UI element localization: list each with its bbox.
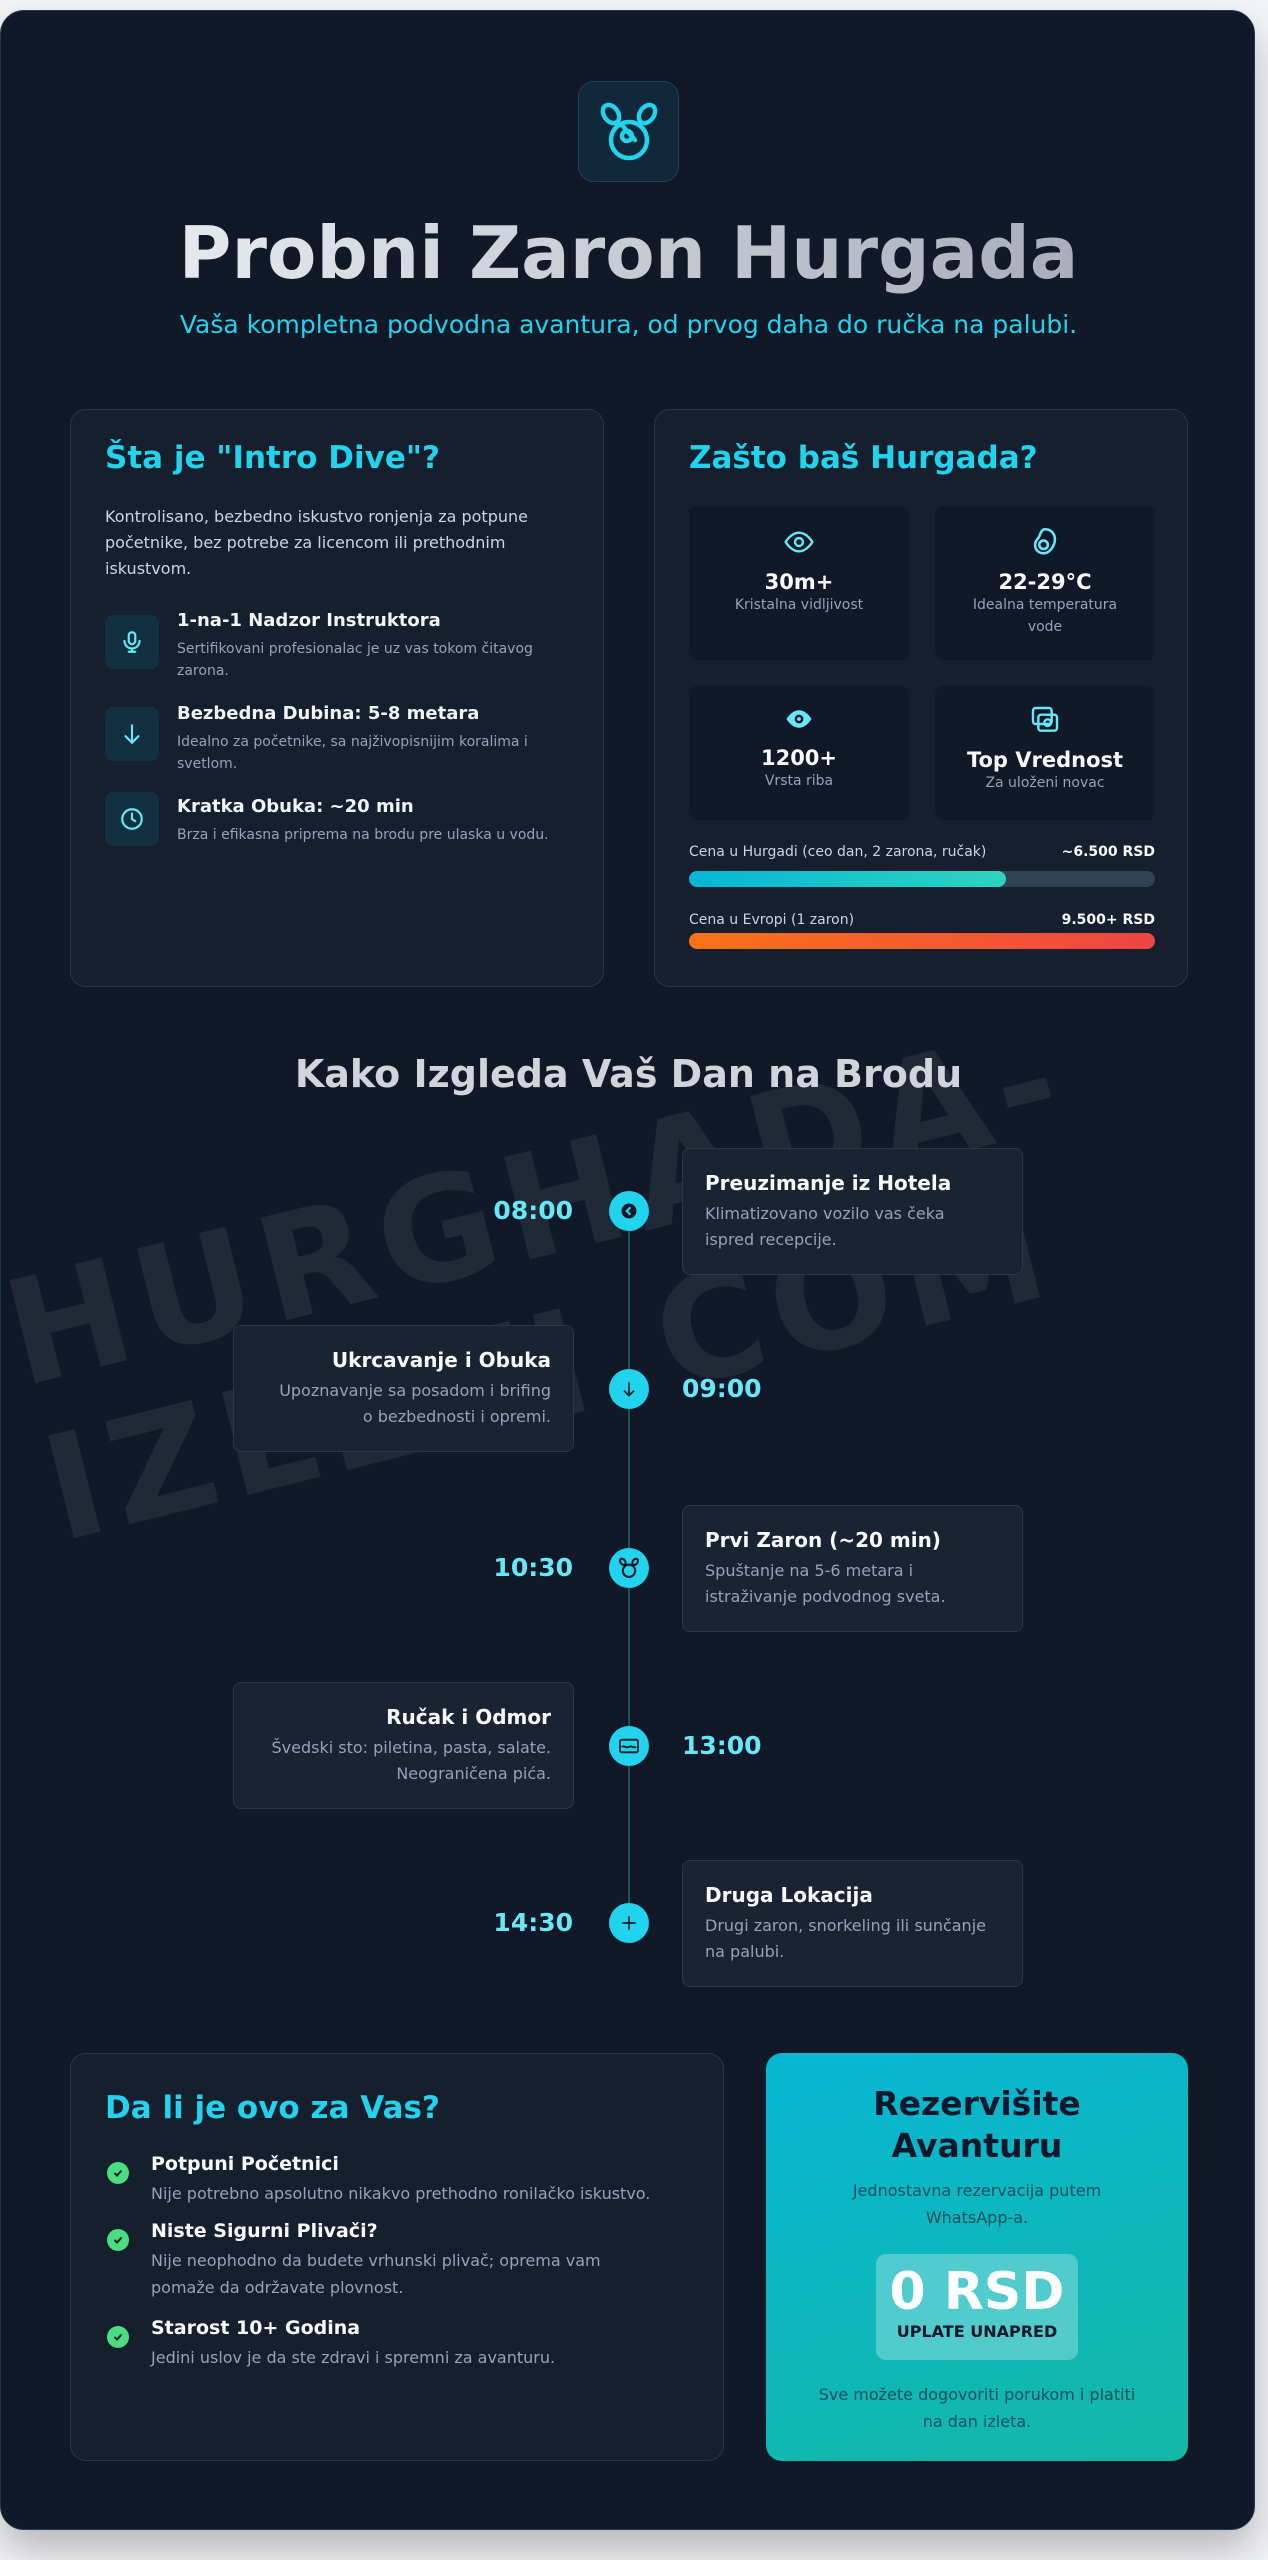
panel: is this for you: Nije potrebno apsolutno nikakvo prethodno ronilačko iskustvo. — [151, 2184, 650, 2203]
bar chart: price comparison: 9.500+ RSD — [1062, 912, 1155, 928]
item 3 — [107, 2326, 129, 2348]
step 13:00: Švedski sto: piletina, pasta, salate. Neograničena pića. — [272, 1738, 551, 1783]
panel: why hurghada: Zašto baš Hurgada? — [689, 440, 1038, 476]
icon: mic — [105, 615, 159, 669]
feature 2: Bezbedna Dubina: 5-8 metara — [177, 703, 479, 724]
bar chart: price comparison: Cena u Evropi (1 zaron) — [689, 912, 854, 928]
panel: is this for you — [70, 2053, 724, 2461]
stat: visibility — [689, 506, 909, 660]
price box: UPLATE UNAPRED — [897, 2322, 1057, 2341]
icon: diver logo — [578, 81, 679, 182]
timeline: 13:00 — [682, 1731, 762, 1760]
step 08:00: 08:00 — [493, 1196, 573, 1225]
panel: is this for you: Jedini uslov je da ste zdravi i spremni za avanturu. — [151, 2348, 555, 2367]
step 13:00 — [233, 1682, 574, 1809]
step 10:30: 10:30 — [493, 1553, 573, 1582]
stat: fish — [689, 686, 909, 820]
stat: temperature: 22-29°C — [998, 570, 1092, 594]
panel: intro dive: Sertifikovani profesionalac je uz vas tokom čitavog zarona. — [177, 641, 533, 679]
bar chart: price comparison: Cena u Hurgadi (ceo dan, 2 zarona, ručak) — [689, 844, 986, 860]
panel: why hurghada — [654, 409, 1188, 987]
step 09:00: Ukrcavanje i Obuka — [332, 1348, 551, 1372]
stat: fish: Vrsta riba — [765, 773, 833, 789]
timeline — [233, 1148, 1023, 1987]
feature 3: Kratka Obuka: ~20 min — [177, 796, 414, 817]
step 09:00: Upoznavanje sa posadom i brifing o bezbednosti i opremi. — [279, 1381, 551, 1426]
panel: is this for you: Potpuni Početnici — [151, 2153, 339, 2175]
timeline: Drugi zaron, snorkeling ili sunčanje na palubi. — [705, 1916, 986, 1961]
stat: value: Top Vrednost — [967, 748, 1123, 772]
stat: fish: 1200+ — [761, 746, 837, 770]
timeline: Preuzimanje iz Hotela — [705, 1171, 951, 1195]
panel: CTA booking: Jednostavna rezervacija putem WhatsApp-a. — [853, 2181, 1101, 2227]
timeline: Druga Lokacija — [705, 1883, 873, 1907]
stat: visibility: Kristalna vidljivost — [735, 597, 863, 613]
timeline: 09:00 — [682, 1374, 762, 1403]
panel: CTA booking: Rezervišite — [873, 2084, 1081, 2123]
panel: CTA booking: Sve možete dogovoriti porukom i platiti na dan izleta. — [819, 2385, 1135, 2431]
item 2 — [107, 2229, 129, 2251]
stat: temperature: vode — [1028, 619, 1062, 635]
stat: value: Za uloženi novac — [985, 775, 1105, 791]
subtitle: Vaša kompletna podvodna avantura, od prvog daha do ručka na palubi. — [180, 310, 1077, 339]
step 14:30: 14:30 — [493, 1908, 573, 1937]
title: Probni Zaron Hurgada — [179, 211, 1078, 295]
text block: Kontrolisano, bezbedno iskustvo ronjenja za potpune početnike, bez potrebe za licencom ili prethodnim iskustvom. — [105, 507, 528, 578]
icon: clock — [105, 792, 159, 846]
stat: visibility: 30m+ — [765, 570, 833, 594]
watermark: IZLETI.COM — [28, 1162, 1071, 1575]
timeline: Prvi Zaron (~20 min) — [705, 1528, 941, 1552]
panel: intro dive: Brza i efikasna priprema na brodu pre ulaska u vodu. — [177, 827, 549, 843]
panel: is this for you: Starost 10+ Godina — [151, 2317, 360, 2339]
panel: is this for you: Da li je ovo za Vas? — [105, 2090, 440, 2126]
item 1 — [107, 2162, 129, 2184]
bar chart: price comparison: ~6.500 RSD — [1062, 844, 1155, 860]
watermark: HURGHADA- — [0, 993, 1085, 1420]
panel: CTA booking: Avanturu — [892, 2126, 1062, 2165]
step 13:00: Ručak i Odmor — [386, 1705, 551, 1729]
price box: 0 RSD — [890, 2262, 1064, 2322]
feature 1: 1-na-1 Nadzor Instruktora — [177, 610, 441, 631]
stat: value — [935, 686, 1155, 820]
panel: intro dive — [70, 409, 604, 987]
timeline: Klimatizovano vozilo vas čeka ispred recepcije. — [705, 1204, 945, 1249]
panel: is this for you: Nije neophodno da budete vrhunski plivač; oprema vam pomaže da održavate plovnost. — [151, 2251, 601, 2297]
bar chart: price comparison — [689, 844, 1155, 949]
step 09:00 — [233, 1325, 574, 1452]
timeline: Spuštanje na 5-6 metara i istraživanje podvodnog sveta. — [705, 1561, 946, 1606]
timeline heading: Kako Izgleda Vaš Dan na Brodu — [295, 1052, 962, 1096]
stat: temperature: Idealna temperatura — [973, 597, 1117, 613]
panel: intro dive: Idealno za početnike, sa najživopisnijim koralima i svetlom. — [177, 734, 528, 772]
panel: CTA booking — [766, 2053, 1188, 2461]
heading: Šta je "Intro Dive"? — [105, 440, 440, 476]
stat: temperature — [935, 506, 1155, 660]
price box — [876, 2254, 1078, 2360]
icon: arrow down — [105, 707, 159, 761]
panel: is this for you: Niste Sigurni Plivači? — [151, 2220, 378, 2242]
